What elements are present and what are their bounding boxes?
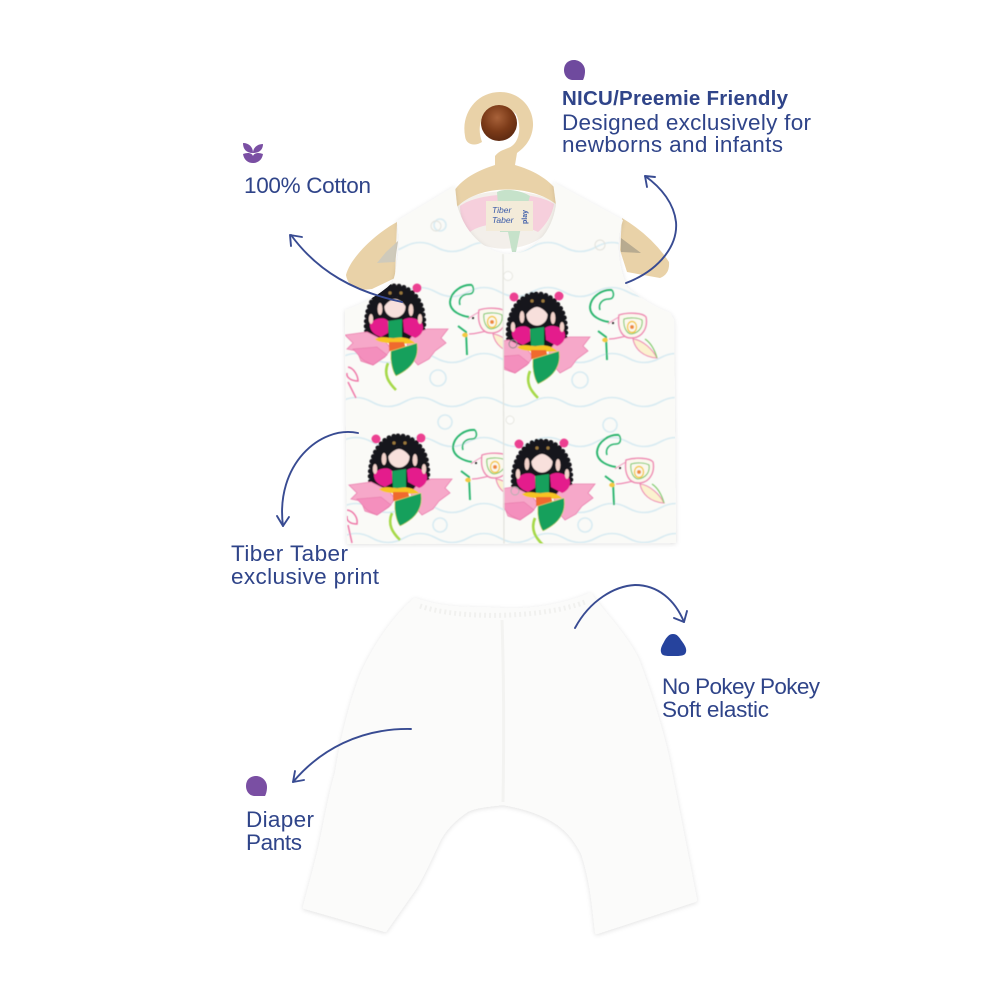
arrow: diaper pants xyxy=(293,729,411,782)
callout: NICU preemie friendly: Designed exclusively for xyxy=(562,110,812,135)
brand label: Taber xyxy=(492,215,515,225)
callout: no pokey pokey: No Pokey Pokey xyxy=(662,674,821,699)
wooden hanger xyxy=(346,92,669,290)
callout: exclusive print xyxy=(231,541,380,589)
hanger wooden ball xyxy=(481,105,517,141)
brand label: play xyxy=(522,210,529,224)
arrow: soft elastic xyxy=(575,585,687,628)
callout: exclusive print: exclusive print xyxy=(231,564,380,589)
callout: NICU preemie friendly: NICU/Preemie Friendly xyxy=(562,87,789,110)
callout: diaper pants: Diaper xyxy=(246,807,314,832)
elephant, top right xyxy=(590,290,657,360)
lady on lotus, top right xyxy=(503,290,591,400)
arrow: NICU / preemie friendly xyxy=(626,176,676,283)
callout: NICU preemie friendly xyxy=(562,87,812,157)
callout: 100% cotton: 100% Cotton xyxy=(244,173,371,198)
callout: no pokey pokey: Soft elastic xyxy=(662,697,769,722)
callout: diaper pants: Pants xyxy=(246,830,302,855)
icon: rounded triangle xyxy=(661,634,686,656)
wave print xyxy=(340,219,692,542)
partial elephant ear fragments xyxy=(347,367,358,543)
brand label: Tiber xyxy=(492,205,512,215)
neck lining xyxy=(456,190,556,252)
callout: no pokey pokey xyxy=(662,674,821,722)
icon: petal NICU xyxy=(564,60,585,80)
right print panel xyxy=(487,290,664,545)
elephant, top left xyxy=(448,283,504,356)
printed shirt xyxy=(340,182,692,545)
callout: exclusive print: Tiber Taber xyxy=(231,541,348,566)
lady on lotus, top left xyxy=(345,284,448,390)
lady on lotus, bottom right xyxy=(492,438,595,545)
lady on lotus, bottom left xyxy=(349,434,452,540)
elephant, bottom right xyxy=(597,435,664,505)
icon: petal diaper xyxy=(246,776,267,796)
brand label xyxy=(486,201,533,231)
elephant, bottom left xyxy=(451,428,504,501)
callout: NICU preemie friendly: newborns and infants xyxy=(562,132,783,157)
callout: diaper pants xyxy=(246,807,314,855)
left print panel xyxy=(345,284,520,543)
arrow: 100% cotton xyxy=(290,235,402,302)
white diaper pants xyxy=(305,595,695,932)
arrow: exclusive print xyxy=(277,432,358,526)
icon: leaf xyxy=(243,143,263,163)
